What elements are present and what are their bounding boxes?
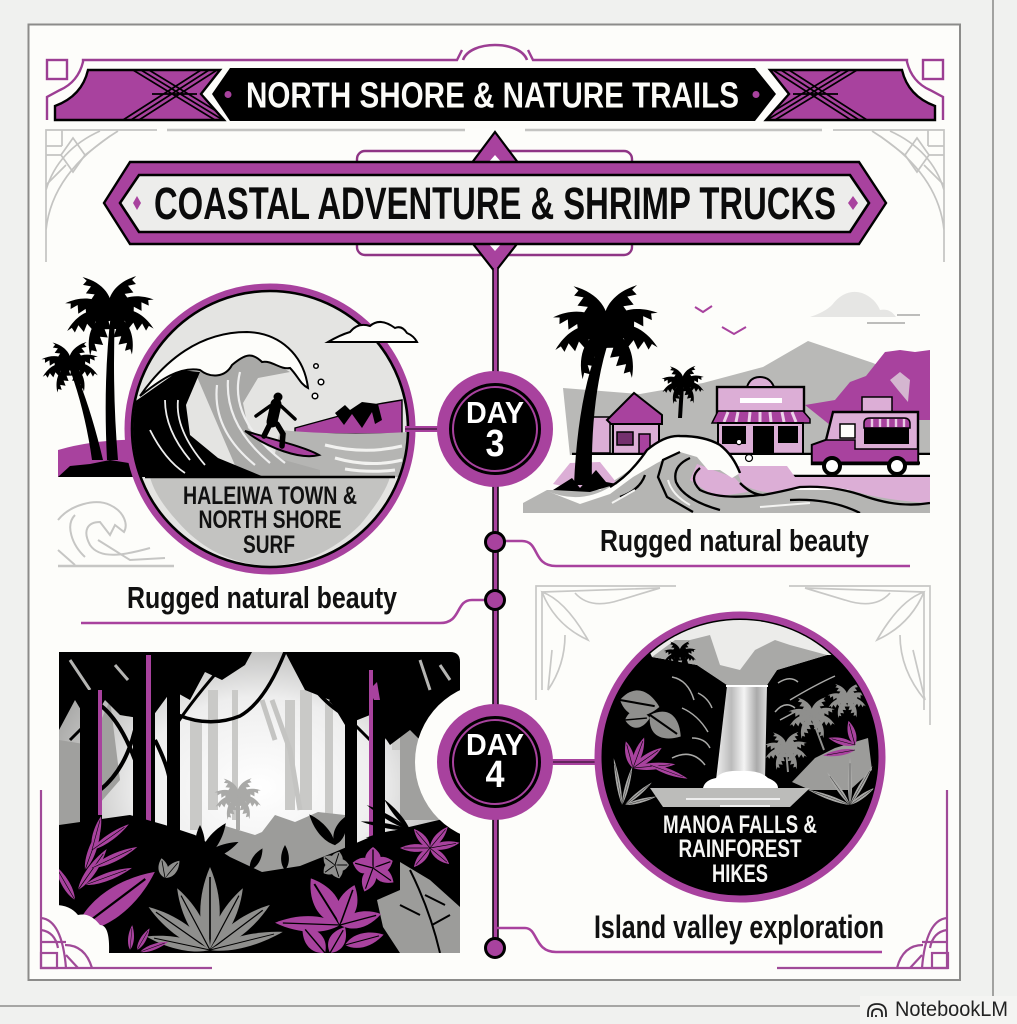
connector: bottom caption — [495, 928, 882, 952]
surfer — [256, 392, 295, 446]
storefront — [712, 377, 810, 454]
mid gray bush — [215, 812, 348, 872]
caption band — [150, 477, 390, 566]
distant misty trees — [190, 690, 402, 830]
sea base — [523, 450, 930, 513]
gray top divider and corner ornaments — [46, 130, 944, 262]
faint cloud — [810, 292, 920, 323]
street — [572, 453, 930, 455]
banner: Coastal Adventure and Shrimp Trucks — [104, 132, 886, 272]
purple leaves right — [822, 720, 859, 759]
icon: faint wave sketch — [58, 502, 174, 566]
mountains — [563, 341, 930, 456]
gray rock — [792, 738, 872, 790]
birds — [695, 306, 746, 334]
vines and branches — [69, 652, 386, 791]
gray fern right — [377, 862, 460, 953]
palms on the shore — [40, 270, 156, 477]
house — [585, 393, 662, 454]
gray central plant — [144, 857, 284, 956]
central timeline — [81, 268, 910, 958]
curling wave — [547, 436, 930, 513]
purple vines — [98, 655, 380, 837]
wave gray body — [195, 352, 320, 477]
surfboard — [245, 431, 319, 456]
pink lagoon — [553, 462, 930, 503]
wave medallion: NORTH SHORE — [198, 506, 342, 534]
wave medallion — [128, 287, 412, 571]
heading: North Shore and Nature Trails: NORTH SHORE & NATURE TRAILS — [246, 74, 739, 116]
gray ornaments around waterfall — [536, 586, 930, 725]
banner backing frame and diamonds — [357, 132, 632, 272]
food truck — [790, 397, 930, 476]
panel: Manoa Falls medallion — [598, 610, 882, 899]
gray palms — [764, 681, 867, 772]
day 3 badge: 3 — [486, 423, 504, 465]
watermark label: NotebookLM — [895, 998, 1008, 1021]
icon: cloud — [328, 322, 417, 342]
day 3 badge: DAY — [466, 395, 524, 430]
frond strokes — [672, 676, 835, 765]
big palm — [551, 278, 661, 492]
wave black body — [130, 370, 264, 477]
sky and distant trees — [630, 610, 850, 685]
purple corner bottom right — [777, 790, 948, 968]
panel: town illustration — [523, 278, 930, 513]
white cutouts — [415, 682, 575, 842]
day 3 badge — [443, 377, 547, 481]
waterfall — [716, 686, 767, 780]
medallion title: MANOA FALLS & — [663, 811, 817, 839]
NotebookLM watermark — [860, 996, 1017, 1024]
gray monstera — [618, 688, 688, 747]
connector: left caption — [81, 600, 495, 623]
flat water — [270, 430, 410, 477]
purple bush right — [400, 826, 460, 867]
gray flower — [324, 852, 349, 878]
small palm — [661, 363, 705, 418]
gray grasses — [612, 758, 876, 807]
day 4 badge: 4 — [486, 754, 504, 796]
top ornament line — [47, 45, 943, 120]
wave medallion: SURF — [243, 531, 295, 559]
banner: North Shore and Nature Trails — [55, 68, 935, 121]
plaque — [104, 162, 886, 244]
black foreground plants — [196, 800, 409, 868]
connectors to circles — [405, 429, 600, 762]
caption: Island valley exploration: Island valley exploration — [594, 909, 884, 945]
misty palm — [215, 778, 261, 830]
black trunks — [80, 690, 385, 848]
purple flower — [352, 847, 394, 892]
purple corner bottom left — [41, 790, 212, 968]
panel: rainforest illustration — [59, 652, 460, 953]
wave white crest — [140, 332, 308, 396]
left purple banner end — [55, 70, 231, 120]
purple leaves left — [622, 736, 689, 781]
distant island — [295, 400, 402, 434]
spray bubbles — [312, 364, 324, 399]
forest floor — [59, 815, 460, 953]
panel: Manoa Falls medallion: HIKES — [712, 860, 768, 888]
caption: Rugged natural beauty left: Rugged natural beauty — [127, 580, 398, 615]
icon: NotebookLM logo — [868, 1004, 886, 1017]
panel: Haleiwa illustration — [40, 270, 417, 571]
purple trees — [805, 350, 930, 425]
plunge pool — [650, 788, 810, 807]
purple foreground plant — [275, 878, 384, 953]
black title plate — [212, 68, 776, 121]
black canopy — [59, 652, 252, 730]
medallion title: HALEIWA TOWN & — [183, 482, 357, 510]
right purple banner end — [759, 70, 935, 120]
foam — [703, 771, 778, 788]
purple fern left — [52, 815, 169, 955]
connector: right caption — [495, 541, 910, 566]
day 4 badge — [443, 710, 547, 814]
caption: Rugged natural beauty right: Rugged natural beauty — [600, 523, 870, 558]
panel: Manoa Falls medallion: RAINFOREST — [678, 835, 802, 863]
day 4 badge: DAY — [466, 727, 524, 762]
timeline nodes — [486, 532, 504, 958]
